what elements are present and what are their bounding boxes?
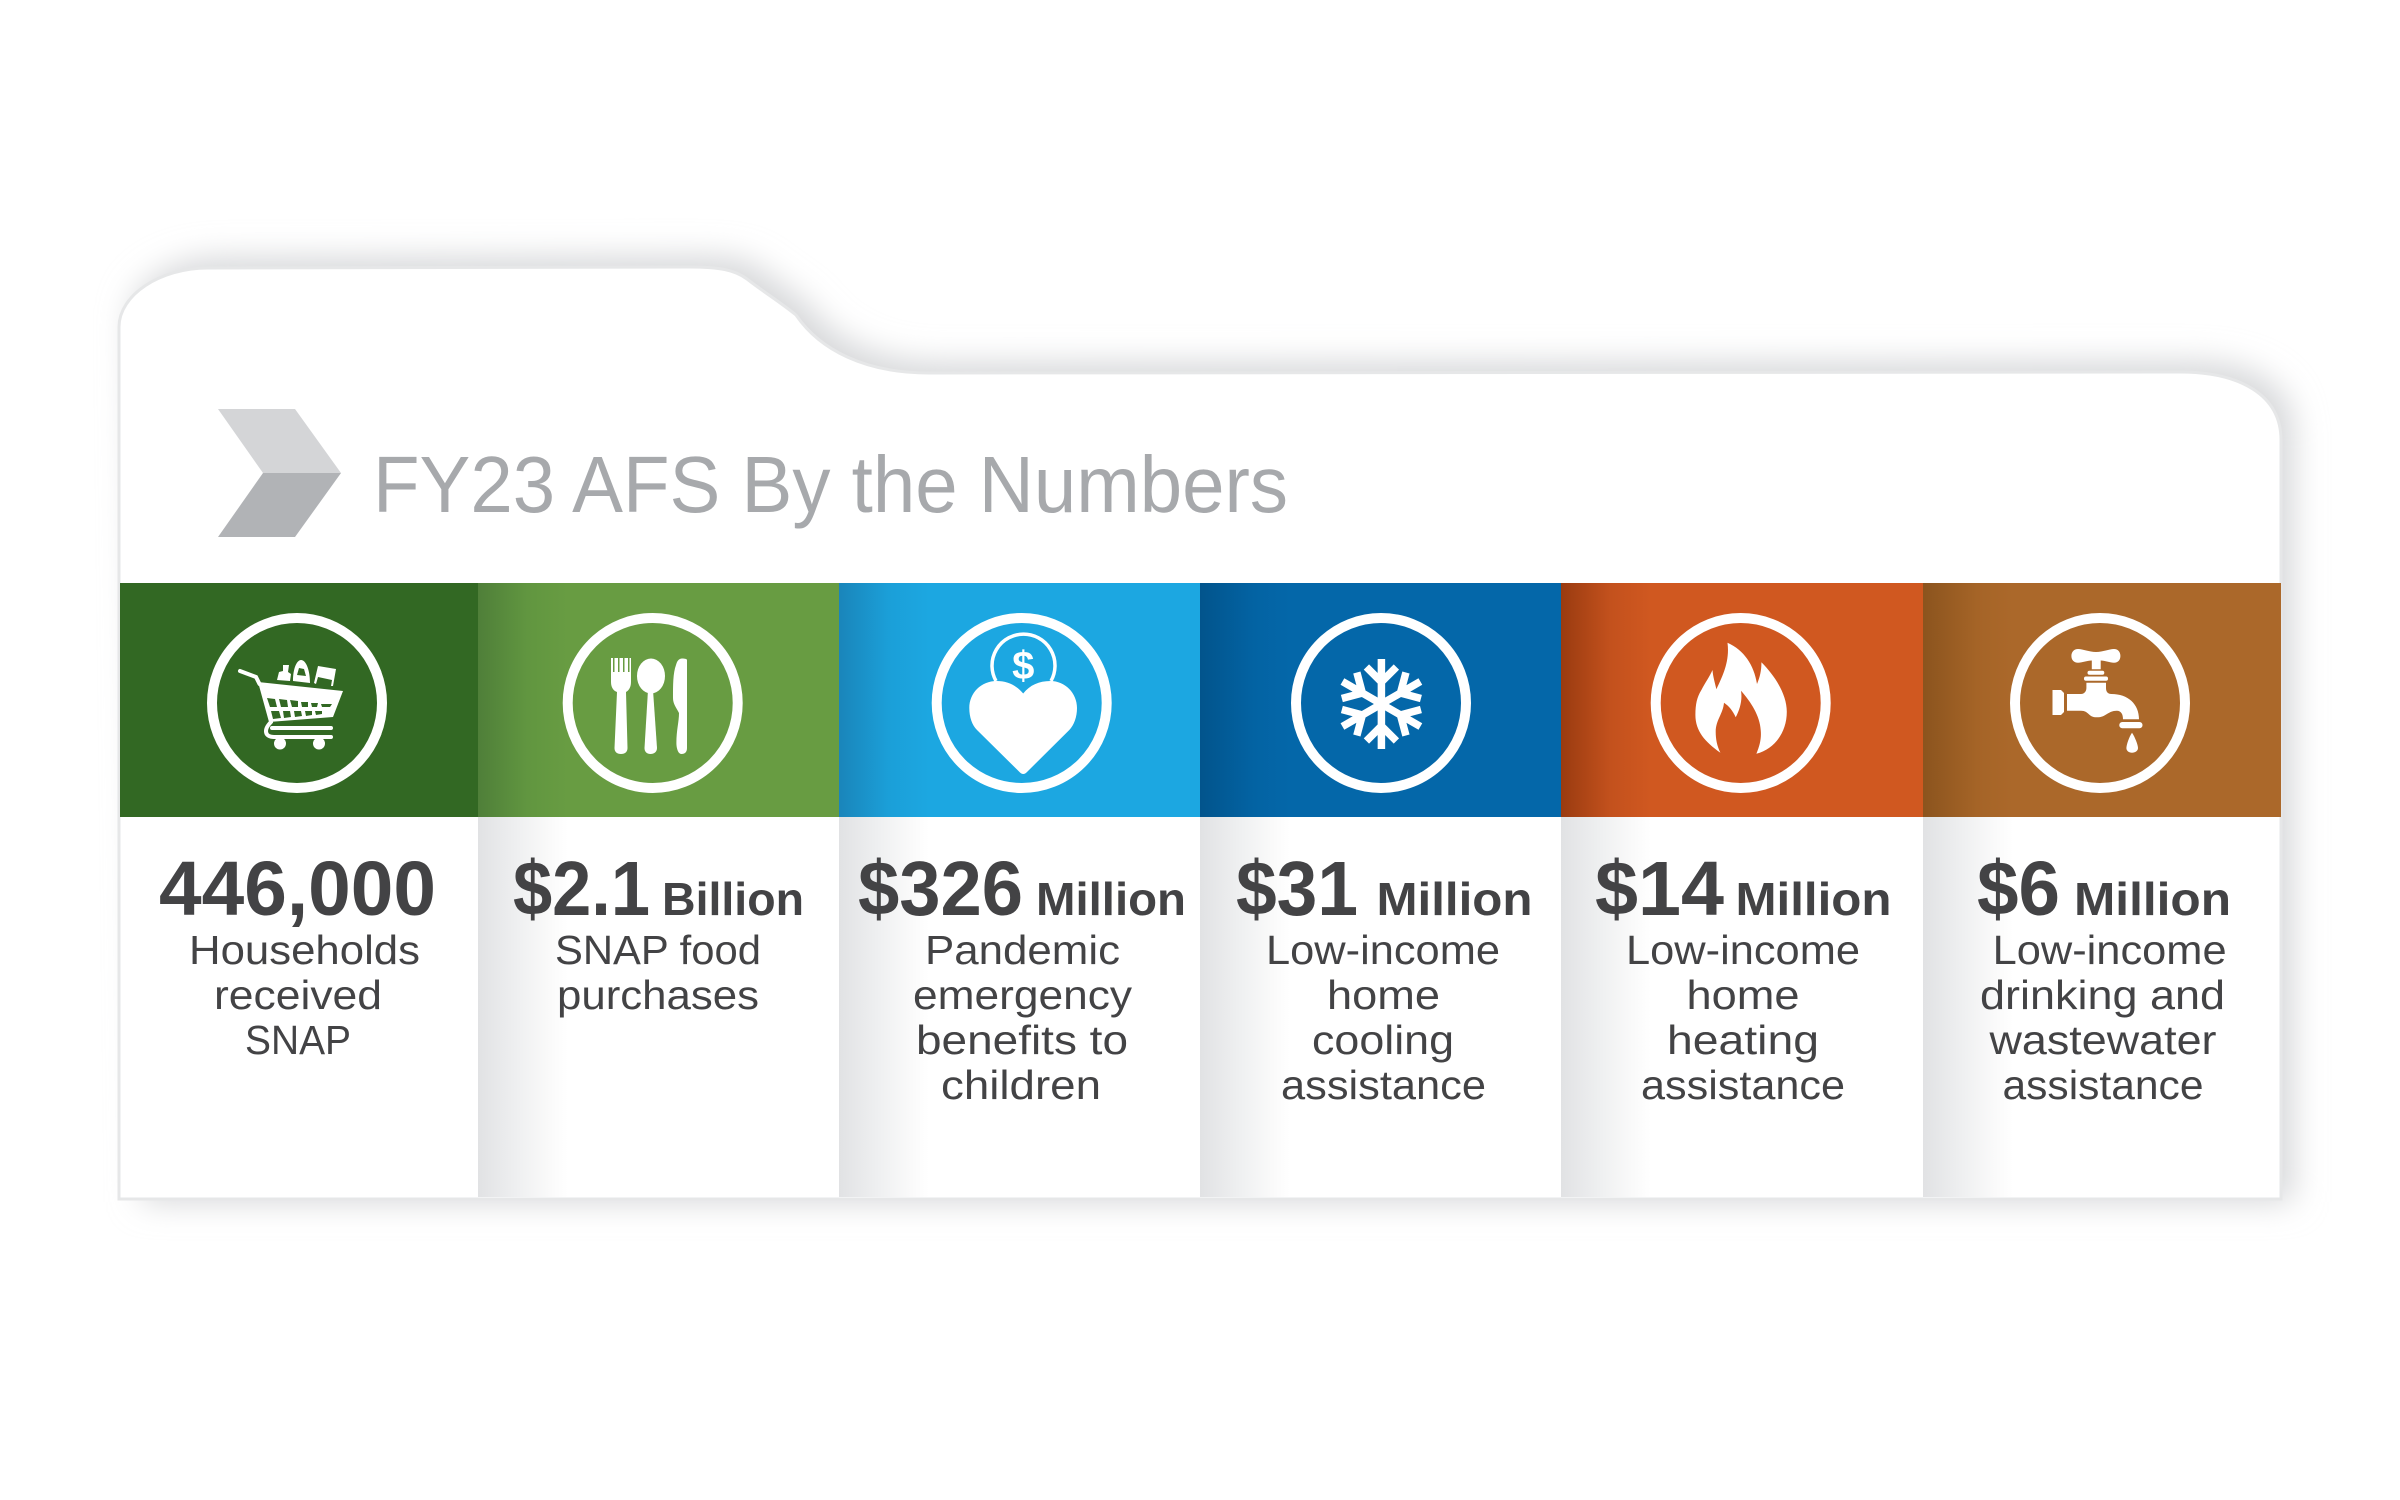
description: benefits to — [916, 1017, 1128, 1063]
column 5: home heating — [1561, 583, 1923, 1197]
band — [478, 583, 839, 817]
band — [1200, 583, 1561, 817]
title: FY23 AFS By the Numbers — [373, 440, 1288, 529]
panel shading — [478, 817, 568, 1197]
figure: $2.1 — [513, 846, 650, 932]
panel shading — [1561, 817, 1651, 1197]
figure: Billion — [662, 873, 804, 925]
figure: Million — [1376, 873, 1532, 925]
description: received — [214, 972, 382, 1018]
description: cooling — [1312, 1017, 1454, 1063]
figure — [1977, 846, 2231, 932]
description: assistance — [1281, 1062, 1486, 1108]
icon: chevron — [218, 409, 341, 537]
panel shading — [1923, 817, 2013, 1197]
figure: 446,000 — [159, 846, 436, 932]
card with folder tab — [119, 267, 2281, 1199]
panel shading — [839, 817, 929, 1197]
figure — [1236, 846, 1532, 932]
band — [839, 583, 1200, 817]
description: purchases — [557, 972, 759, 1018]
description: assistance — [1641, 1062, 1845, 1108]
column 1: SNAP households — [120, 583, 478, 1063]
icon: cutlery — [568, 618, 738, 788]
icon: flame — [1656, 618, 1826, 788]
icon: dripping faucet — [2015, 618, 2185, 788]
description — [555, 927, 761, 1018]
description — [913, 927, 1133, 1108]
card shadow — [131, 257, 2293, 1202]
description — [1266, 927, 1500, 1108]
description — [1626, 927, 1860, 1108]
description: emergency — [913, 972, 1133, 1018]
description — [1980, 927, 2227, 1108]
band — [1561, 583, 1923, 817]
description: Low-income — [1266, 927, 1500, 973]
panel shading — [1200, 817, 1290, 1197]
column 3: pandemic emergency benefits — [839, 583, 1200, 1197]
figure: $31 — [1236, 846, 1358, 932]
description: Low-income — [1993, 927, 2227, 973]
description: Low-income — [1626, 927, 1860, 973]
figure: Million — [2074, 873, 2231, 925]
description: heating — [1667, 1017, 1819, 1063]
description: children — [941, 1062, 1101, 1108]
heading — [218, 409, 1288, 537]
figure: Million — [1036, 873, 1186, 925]
icon: snowflake — [1296, 618, 1466, 788]
description: Pandemic — [925, 927, 1120, 973]
figure — [1595, 846, 1892, 932]
figure: Million — [1736, 873, 1892, 925]
description: SNAP food — [555, 927, 761, 973]
figure — [513, 846, 804, 932]
description: wastewater — [1988, 1017, 2216, 1063]
icon: shopping cart — [212, 618, 382, 788]
description: home — [1686, 972, 1800, 1018]
description: drinking and — [1980, 972, 2225, 1018]
icon: heart with dollar coin — [937, 618, 1107, 788]
column 4: home cooling — [1200, 583, 1561, 1197]
column 2: SNAP food purchases — [478, 583, 839, 1197]
figure: $14 — [1595, 846, 1724, 932]
icon: heart with dollar coin: $ — [1012, 644, 1034, 688]
description: SNAP — [245, 1017, 351, 1063]
description: assistance — [2002, 1062, 2204, 1108]
description — [189, 927, 420, 1063]
band — [120, 583, 478, 817]
figure — [858, 846, 1186, 932]
figure: $326 — [858, 846, 1023, 932]
description: home — [1327, 972, 1440, 1018]
description: Households — [189, 927, 420, 973]
band — [1923, 583, 2281, 817]
column 6: water assistance — [1923, 583, 2281, 1197]
figure: $6 — [1977, 846, 2060, 932]
